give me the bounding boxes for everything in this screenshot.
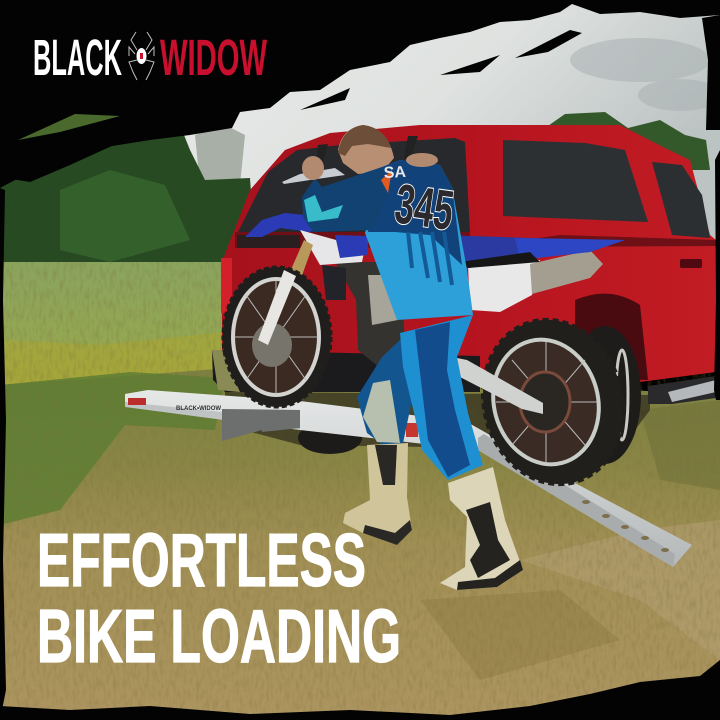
logo word: WIDOW: WIDOW [160, 29, 267, 86]
red reflector right [406, 423, 418, 437]
front rim [233, 279, 319, 395]
rear tire [465, 304, 641, 500]
rear sprocket [520, 372, 570, 432]
red reflector left [128, 398, 146, 405]
pickup truck [212, 125, 716, 464]
seat [440, 235, 625, 268]
logo icon: spider [129, 32, 154, 80]
jersey name: SA [383, 164, 407, 182]
headline line 1: EFFORTLESS [37, 518, 366, 602]
knee patch [363, 380, 400, 443]
bumper [212, 350, 480, 392]
clouds [570, 38, 720, 111]
logo: BLACK [33, 29, 122, 86]
side window 2 [652, 162, 710, 238]
left tree line [0, 100, 256, 265]
side step [648, 376, 716, 404]
left edge [0, 188, 6, 720]
wheel well [575, 294, 648, 380]
number plate [300, 230, 365, 265]
rider [302, 125, 523, 590]
ramp holes [582, 500, 669, 552]
side window 1 [503, 140, 648, 222]
hitch bracket [222, 409, 300, 441]
jersey sleeve [302, 167, 388, 232]
front hub [252, 323, 292, 367]
swingarm [457, 358, 543, 414]
jersey number: 345 [391, 171, 458, 242]
cap [222, 125, 716, 262]
front fork [260, 240, 313, 345]
mirror stalks [316, 144, 328, 165]
rear wheel [457, 304, 641, 500]
truck rear tire [569, 326, 641, 464]
ramp side rail [478, 434, 675, 567]
headline line 2: BIKE LOADING [37, 594, 401, 678]
rear window [238, 138, 470, 232]
truck body [222, 236, 716, 382]
jersey stripes [408, 232, 452, 285]
door handle [680, 259, 702, 268]
orange shoulder accent [381, 170, 392, 193]
bottom edge [0, 660, 720, 720]
front tire [223, 267, 331, 407]
right edge [702, 15, 720, 130]
pants right leg [400, 315, 483, 480]
hitch ramp deck [125, 390, 692, 567]
ramp [125, 390, 692, 567]
head [338, 125, 394, 174]
dirt bike [223, 136, 641, 500]
front fender [245, 213, 322, 237]
right boot [440, 467, 523, 590]
right tree line [545, 112, 710, 170]
tail light [221, 258, 232, 313]
grunge streak [5, 140, 125, 182]
pants left leg [357, 338, 412, 445]
sky [0, 0, 720, 270]
bare tree [195, 125, 245, 185]
truck shadow [225, 392, 650, 450]
handlebar [282, 168, 345, 184]
rear rim [479, 328, 613, 476]
rear fender and exhaust [468, 260, 540, 312]
ramp brand label: BLACK•WIDOW [176, 406, 221, 412]
ground grass [0, 368, 720, 720]
sky flecks [515, 30, 582, 58]
top black mass [0, 0, 720, 188]
jersey [302, 153, 473, 320]
hands [302, 156, 324, 180]
meadow [0, 262, 260, 387]
headline [37, 518, 401, 678]
left boot [343, 443, 412, 545]
hair [338, 125, 391, 156]
bed shadow [237, 235, 300, 248]
engine [335, 262, 405, 368]
pants [357, 315, 483, 480]
front wheel [223, 267, 331, 407]
grass texture [0, 262, 720, 720]
jersey torso [365, 160, 473, 320]
